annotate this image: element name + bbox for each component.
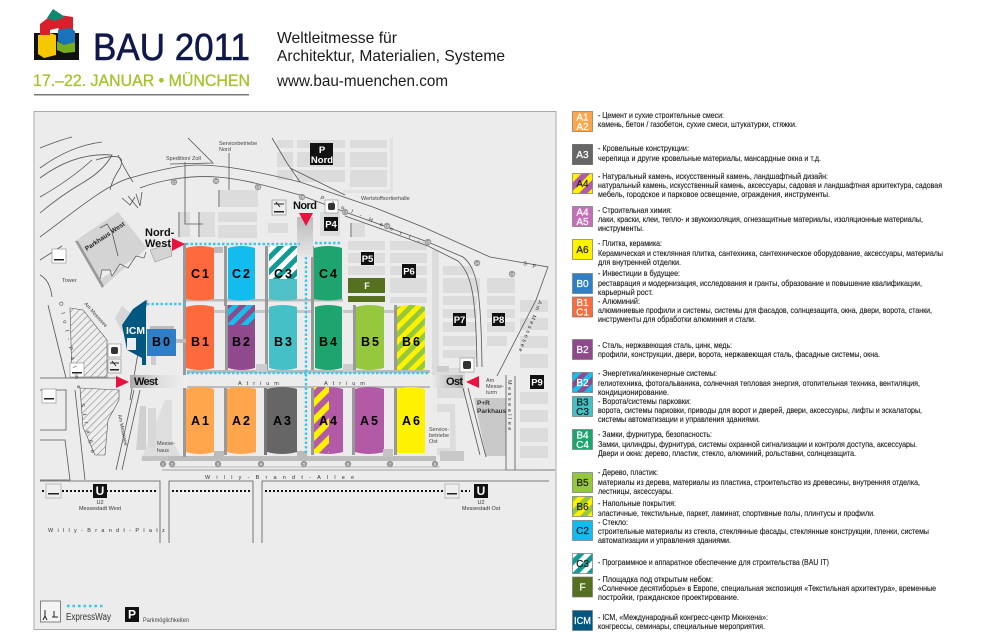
hall A1 [186,387,214,454]
map place labels: Am Messesee [116,414,129,447]
hall A5: A5 [360,414,380,428]
hall C2 [228,246,255,300]
legend: B1 C1: алюминиевые профили и системы, системы для фасадов, солнцезащита, окна, двери, ворота, станки, [598,306,932,315]
hall C4: C4 [319,267,339,281]
legend: B6 [572,496,875,518]
map place labels: Servicebetriebe [219,141,257,147]
hall A2 [227,387,256,454]
hall C1: C1 [191,267,211,281]
road number markers: 17 [343,210,348,214]
map key: ExpressWay: ExpressWay [66,612,111,623]
station: Messestadt West: U [96,484,104,498]
legend: A4 striped: мебель, городское и парковое освещение, ограждения, инструменты. [598,190,830,199]
ExpressWay routes [147,243,430,453]
entrance: Ost [446,376,479,388]
hall A4 [314,387,343,454]
legend: ICM [572,610,768,631]
legend: B3 C3: - Ворота/системы парковки: [598,397,691,406]
hall B1: B1 [191,335,211,349]
legend: B4 C4: Замки, цилиндры, фурнитура, системы охранной сигнализации и контроля доступа, аксессуары. [598,440,917,449]
legend: B1 C1: - Алюминий: [598,297,640,306]
road number markers [160,178,515,467]
road number markers: 20 [214,178,219,184]
road number markers: 7 [389,462,392,466]
legend: B3 C3: B3 [576,398,589,408]
legend: A6: - Плитка, керамика: [598,239,662,248]
map place labels: Am Messesee [516,299,543,354]
legend: A4 striped: - Натуральный камень, искусственный камень, ландшафтный дизайн: [598,172,828,181]
building: ICM [115,300,146,365]
legend: A4 A5: - Строительная химия: [598,206,672,215]
hall A3: A3 [273,414,293,428]
hall A5 [355,387,384,454]
legend: A4 striped [572,172,942,199]
legend: B0 [572,269,922,297]
legend: B5: - Дерево, пластик: [598,468,658,477]
road number markers: 21 [172,180,177,184]
station: Messestadt West: U2 [96,500,104,506]
legend: F: «Солнечное десятиборье» в Европе, специальная экспозиция «Текстильная архитектура», временные [598,584,936,593]
legend: B2 striped: B2 [576,378,589,389]
legend: A1 A2: - Цемент и сухие строительные смеси: [598,111,724,120]
hall F [348,278,385,302]
entrance: Nord-West [145,227,185,251]
map key: ExpressWay [40,601,111,623]
hall B5: B5 [361,335,381,349]
legend: B6: эластичные, текстильные, паркет, ламинат, спортивные полы, плинтусы и профили. [598,509,875,518]
tagline [276,30,505,90]
heading: BAU 2011: BAU 2011 [93,27,250,69]
icon: coloured building blocks [34,9,79,60]
building: Parkhaus West: Parkhaus West [84,220,127,253]
legend: B2 striped [572,369,920,397]
parking markers: P4 [325,220,338,230]
road number markers: 5 [303,462,306,466]
map place labels: Spedition/ Zoll [166,156,201,162]
building: ICM: ICM [126,326,145,337]
tagline: Architektur, Materialien, Systeme [277,48,505,65]
legend: F: постройки, гражданское проектирование. [598,593,739,602]
hall A6 [397,387,425,453]
road number markers: 4 [260,462,263,466]
legend: B2 striped: кондиционирование. [598,388,669,397]
panel: legend [572,111,943,631]
legend: C2: C2 [576,526,589,537]
legend: B2 striped: - Энергетика/инженерные системы: [598,369,717,378]
legend: A6: Керамическая и стеклянная плитка, сантехника, сантехническое оборудование, аксессуары, материалы [598,249,943,258]
legend: A3 [572,144,821,164]
legend: F: - Площадка под открытым небом: [598,575,713,584]
U-Bahn line [42,484,501,512]
road number markers: 16 [385,224,390,228]
hall C2: C2 [232,267,252,281]
hall A3 [267,387,297,454]
legend: A6: A6 [576,245,589,256]
legend: B3 C3: системы автоматизации и управления зданиями. [598,415,760,424]
map place labels: Messe- [486,384,504,390]
legend: A4 A5 [572,206,923,233]
legend: A1 A2: камень, бетон / газобетон, сухие смеси, штукатурки, стяжки. [598,120,797,129]
map place labels: Willy-Brandt-Platz [48,528,169,534]
station: Messestadt Ost: U [477,484,485,498]
hall B1 [186,305,214,370]
road number markers: 19 [256,184,261,190]
map place labels: P+R [477,400,490,407]
map place labels: haus [157,448,169,454]
legend: B5: материалы из дерева, материалы из пластика, строительство из древесины, внутренняя отделка, [598,478,920,487]
map place labels: Wertstoffsortierhalle [361,196,410,202]
legend: C3 striped: C3 [576,559,589,570]
map place labels: Parkhaus [477,408,507,415]
entrance: Nord: Nord [293,200,317,212]
legend: A1 A2: A1 [576,112,589,124]
icons: car, plane and train signs [42,200,474,403]
hall B6 [397,305,425,370]
station: Messestadt West: Messestadt West [79,506,122,512]
legend: A4 A5: инструменты. [598,224,644,233]
parking markers: P9 [531,378,543,388]
road number markers: 8 [434,462,437,466]
legend: B5 [572,468,920,496]
legend: B1 C1 [572,297,932,324]
legend: B1 C1: инструменты для обработки алюминия и стали. [598,315,756,324]
road number markers: 18 [300,194,305,200]
legend: B2: - Сталь, нержавеющая сталь, цинк, медь: [598,341,732,350]
legend: A6 [572,239,943,267]
map place labels: Am Messesee [83,301,108,329]
legend: F [572,575,936,602]
road number markers: 6 [347,462,350,466]
hall B2: B2 [232,335,252,349]
map place labels: Atrium [324,381,370,387]
entrance: Nord [293,200,317,226]
connectors and atrium [183,217,432,457]
legend: A3: A3 [576,150,589,161]
map place labels: Olof-Palme-Straße [57,301,96,460]
station: Messestadt Ost: U2 [477,500,485,506]
legend: B6: - Напольные покрытия: [598,499,676,508]
station: Messestadt West [46,484,122,512]
hall C3 [269,246,297,300]
map place labels: Service- [429,427,449,433]
map place labels: Atrium [238,381,284,387]
entrance: West [116,376,158,388]
map key: parking: Parkmöglichkeiten [143,618,189,624]
legend: A3: черепица и другие кровельные материалы, мансардные окна и т.д. [598,154,821,163]
legend: B5: лестницы, аксессуары. [598,487,673,496]
parking markers [310,143,544,389]
hall B0 [147,326,186,365]
exhibition halls [147,217,432,459]
legend: C2: автоматизации и управления зданиями. [598,536,731,545]
hall B3: B3 [274,335,294,349]
road number markers: 1 [162,462,165,466]
legend: B4 C4: - Замки, фурнитура, безопасность: [598,430,712,439]
gate bands: West and Ost [130,366,463,388]
hall A6: A6 [402,414,422,428]
hall C4 [314,246,342,300]
legend: A4 A5: A5 [576,217,589,228]
map place labels: betriebe [429,433,449,439]
map place labels: Tower [62,278,77,284]
date and location: 17.–22. JANUAR • MÜNCHEN [33,71,250,90]
legend: B4 C4: B4 [576,430,589,442]
building: Parkhaus West [75,212,172,288]
hall B0: B0 [152,335,172,349]
hall B4 [315,305,342,370]
legend: A1 A2: A2 [576,122,589,133]
tagline: Weltleitmesse für [277,30,398,47]
hall B4: B4 [319,335,339,349]
legend: ICM: ICM [574,616,591,627]
legend: A6: для внутренней отделки. [598,258,681,267]
map place labels: turm [486,390,497,396]
legend: C2: строительные материалы из стекла, стеклянные фасады, стеклянные конструкции, пленки, системы [598,527,929,536]
legend: ICM: - ICM, «Международный конгресс-центр Мюнхена»: [598,613,768,622]
road number markers: 3 [217,462,220,466]
entrance: Ost: Ost [446,376,463,388]
legend: A4 striped: A4 [576,179,589,190]
map place labels: Paul-Henri- [319,195,427,248]
road number markers: 14 [475,260,480,266]
parking markers: P [319,145,326,156]
station: Messestadt Ost [445,484,501,512]
legend: B4 C4: Двери и окна: дерево, пластик, стекло, алюминий, рольставни, солнцезащита. [598,449,856,458]
legend: A4 A5: лаки, краски, клеи, тепло- и звукоизоляция, огнезащитные материалы, изоляционные материалы, [598,215,923,224]
map key: parking: P [128,608,136,622]
Messehaus area [136,400,436,461]
legend: B3 C3: ворота, системы парковки, приводы для ворот и дверей, двери, аксессуары, лифты и эскалаторы, [598,406,922,415]
header: BAU 2011 logo and tagline [33,9,505,96]
legend: B0: карьерный рост. [598,288,653,297]
parking markers: P8 [493,315,504,326]
parking markers: P5 [362,254,374,265]
legend: B2: профили, конструкции, двери, ворота, нержавеющая сталь, фасадные системы, окна. [598,350,880,359]
hall B6: B6 [402,335,422,349]
legend: B0: - Инвестиции в будущее: [598,269,680,278]
legend: B4 C4 [572,430,917,458]
road number markers: 13 [510,272,515,276]
parking markers: P7 [454,315,465,326]
hatched areas west [70,308,119,455]
hall C3: C3 [274,267,294,281]
entrance: Nord-West: Nord- [145,227,175,239]
map place labels: Sp [523,261,542,270]
parking markers: Nord [311,155,333,166]
legend: B1 C1: B1 [576,298,589,309]
legend: B2 striped: гелиотехника, фотогальваника, солнечная тепловая энергия, отопительная техника, вентиляция, [598,379,920,388]
legend: C2 [572,518,929,545]
hall A1: A1 [191,414,211,428]
road number markers: 2 [171,462,174,466]
roads [40,137,555,543]
hall B5 [356,305,384,370]
legend: A1 A2 [572,111,797,133]
hall C1 [186,246,214,300]
map place labels: Messe- [157,441,175,447]
legend: B6: B6 [576,502,589,513]
map place labels: Messeallee [506,380,512,433]
hall B3 [269,305,297,370]
station: Messestadt Ost: Messestadt Ost [462,506,501,512]
legend: B1 C1: C1 [576,308,589,318]
service and parking blocks [178,138,548,461]
legend: ICM: конгрессы, семинары, специальные мероприятия. [598,622,765,631]
legend: B4 C4: C4 [576,440,589,451]
map place labels: Am [486,378,495,384]
legend: C3 striped [572,554,829,574]
road number markers: 15 [426,240,431,244]
legend: A4 striped: натуральный камень, искусственный камень, аксессуары, садовая и ландшафтная архитектура, садовая [598,181,942,190]
legend: B0: B0 [576,279,589,290]
map key: parking [125,607,189,624]
legend: B2: B2 [576,345,589,356]
map place labels: Willy-Brandt-Allee [205,475,360,481]
legend: B2 [572,340,880,360]
tagline: www.bau-muenchen.com [276,73,448,90]
legend: B5: B5 [576,478,589,489]
parking markers: P6 [403,266,415,278]
map place labels: Nord [219,147,231,153]
entrance: West: West [134,376,158,388]
legend: B0: реставрация и модернизация, исследования и гранты, образование и повышение квалификации, [598,279,922,288]
map place labels [48,141,543,534]
map place labels: Ost [429,439,438,445]
legend: B3 C3 [572,396,922,424]
panel: exhibition site map [34,112,556,630]
legend: A3: - Кровельные конструкции: [598,144,689,153]
legend: A4 A5: A4 [576,208,589,218]
legend: C2: - Стекло: [598,518,628,527]
hall A2: A2 [232,414,252,428]
entrance: Nord-West: West [145,238,171,250]
legend: C3 striped: - Программное и аппаратное обеспечение для строительства (BAU IT) [598,558,829,567]
hall F: F [364,281,370,291]
hall B2 [228,305,255,370]
hall A4: A4 [319,414,339,428]
legend: B3 C3: C3 [576,407,589,418]
legend: F: F [579,582,586,594]
